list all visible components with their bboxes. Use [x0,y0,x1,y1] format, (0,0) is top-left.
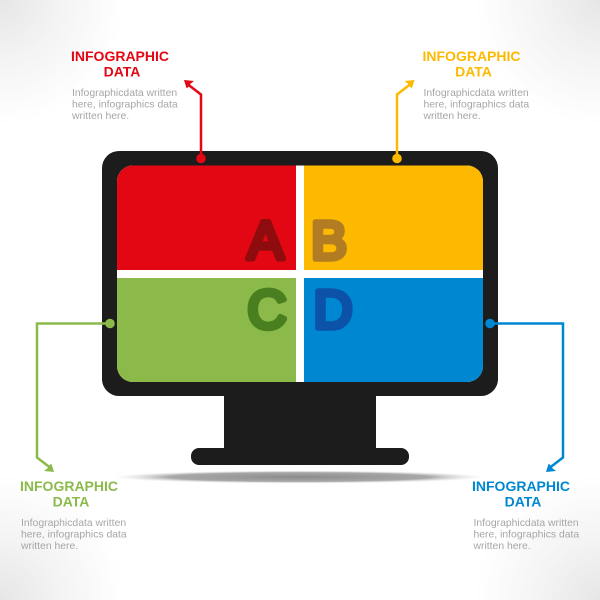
screen backing [117,166,483,382]
text block: blue: here, infographics data [474,530,579,540]
text block: green: Infographicdata written [21,518,126,529]
heading: blue: INFOGRAPHIC [472,478,570,494]
arrow: red [184,80,206,163]
heading: yellow: INFOGRAPHIC [422,48,520,64]
heading: yellow: DATA [455,64,492,80]
panel: B yellow [304,166,483,270]
text block: green: written here. [20,541,78,552]
heading: green: INFOGRAPHIC [20,478,118,494]
monitor shadow [113,470,485,484]
heading: blue: DATA [505,494,541,510]
text block: blue: Infographicdata written [474,518,579,529]
panel: C green [117,278,296,382]
text block: green: here, infographics data [21,530,127,540]
text block: yellow: Infographicdata written [424,88,529,99]
letter C: C [248,280,286,340]
monitor base [191,448,409,465]
text block: blue: written here. [472,541,531,552]
text block: red: here, infographics data [72,100,178,110]
heading: green: DATA [53,494,89,510]
heading: red: DATA [104,64,140,80]
monitor [102,151,498,465]
arrow: yellow [392,80,414,163]
letter A: A [247,211,284,271]
heading: red: INFOGRAPHIC [71,48,169,64]
panel: A red [117,166,296,270]
screen [117,166,483,382]
letter B: B [311,211,347,271]
text block: yellow: here, infographics data [424,100,529,110]
monitor frame [102,151,498,396]
letter D: D [314,280,352,340]
panel: D blue [304,278,483,382]
monitor stand [224,390,376,452]
arrow: blue [485,319,563,472]
arrow: green [37,319,115,472]
text block: red: written here. [71,111,129,122]
text block: red: Infographicdata written [72,88,177,99]
text block: yellow: written here. [422,111,481,122]
